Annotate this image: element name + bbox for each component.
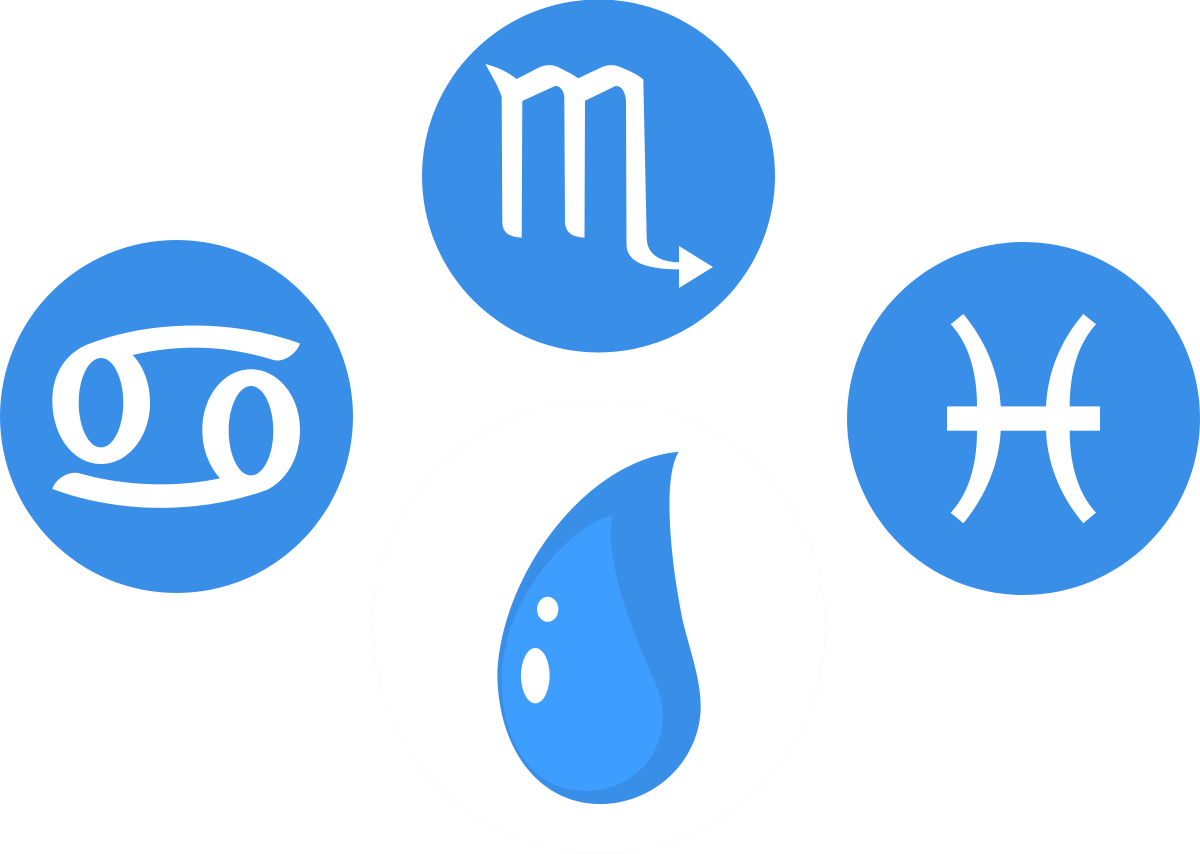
highlight: large <box>521 648 550 703</box>
badge: Cancer <box>0 240 353 593</box>
badge: water element <box>372 400 826 854</box>
badge: Pisces <box>847 242 1200 595</box>
icon: Scorpio glyph <box>486 64 713 288</box>
highlight: small <box>537 597 558 622</box>
icon: Pisces glyph <box>947 314 1100 523</box>
icon: water drop <box>497 452 701 804</box>
badge: Scorpio <box>422 0 775 352</box>
icon: Cancer glyph <box>52 325 300 508</box>
